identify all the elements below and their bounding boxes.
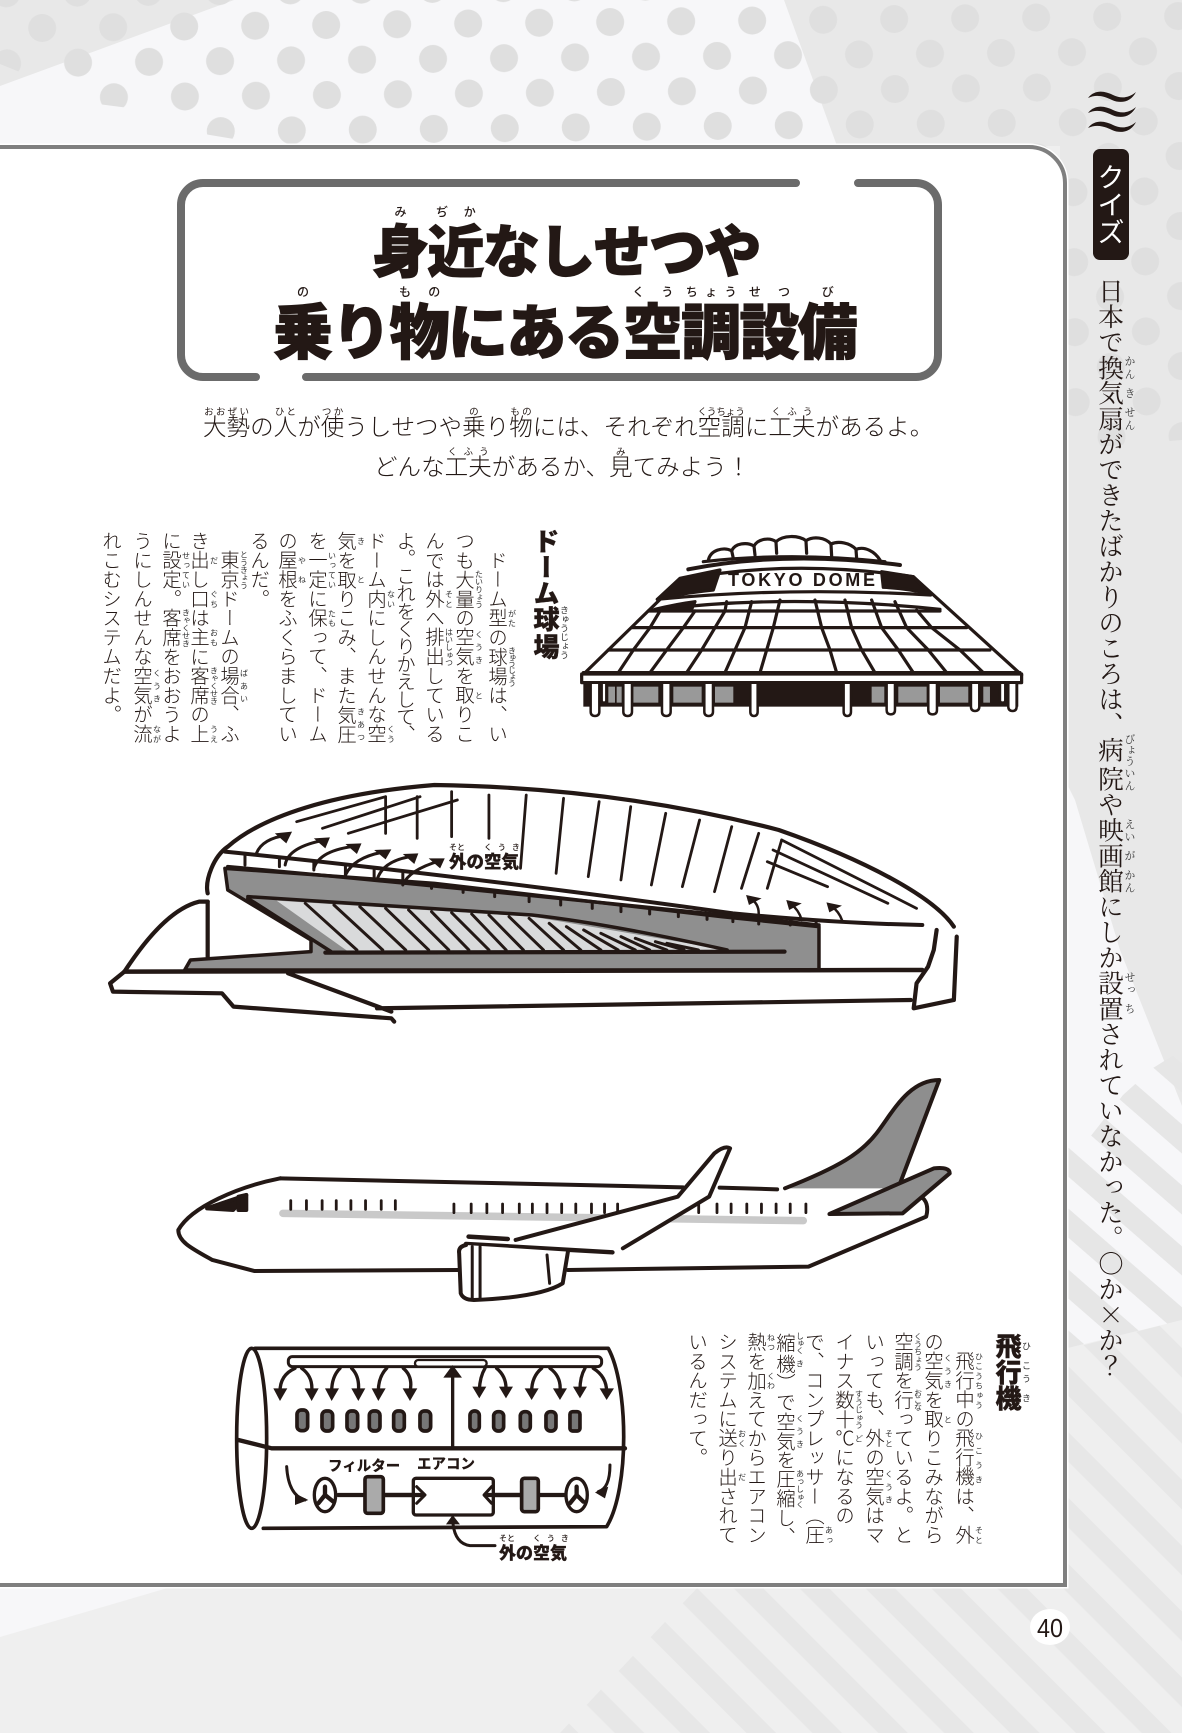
text block: dome stadium explanation: を 一定いってい に 保たも って、ドーム xyxy=(304,531,338,743)
text block: airplane explanation: 空調くうちょう を 行おこな っているよ。と xyxy=(890,1332,924,1544)
label: outside air (cabin): 外の空気 xyxy=(499,1539,567,1564)
intro text line 1: 大勢おおぜいの人ひとが使つかうしせつや乗のり物ものには、それぞれ空調くうちょうに工夫くふうがあるよ。 xyxy=(203,404,933,442)
text block: dome stadium explanation: よ。これをくりかえして、 xyxy=(392,531,420,742)
text block: dome stadium explanation: に 設定せってい 。 客席きゃくせき をおおうよ xyxy=(158,531,192,743)
icon: wave marks xyxy=(1088,92,1136,132)
label: outside air (cabin): くうき xyxy=(533,1533,575,1544)
text block: airplane explanation: 飛行中ひこうちゅう の 飛行機ひこうき は、 外そと xyxy=(951,1351,984,1544)
text block: dome stadium explanation: き 出だ し 口ぐち は 主おも に 客席きゃくせき の 上うえ xyxy=(186,531,220,743)
text block: airplane explanation: いるんだって。 xyxy=(684,1332,712,1467)
heading: dome stadium: ドーム 球きゅう 場じょう xyxy=(528,528,571,660)
quiz badge xyxy=(1093,149,1129,260)
text block: airplane explanation: で、コンプレッサー（ 圧あっ xyxy=(801,1332,834,1544)
text block: dome stadium explanation: つも 大量たいりょう の 空気くうき を 取と りこ xyxy=(451,531,484,743)
page number: 40 xyxy=(1037,1613,1063,1643)
text block: airplane explanation: 縮しゅく 機き ）で 空気くうき を 圧縮あっしゅく し、 xyxy=(772,1332,806,1547)
text block: dome stadium explanation: ドーム 内ない にしんせんな 空くう xyxy=(363,531,396,743)
text block: airplane explanation: イナス 数十すうじゅう ℃ど になるの xyxy=(831,1332,864,1525)
label: outside air (dome): そと xyxy=(449,842,465,853)
text block: dome stadium explanation: 気き を 取と りこみ、また 気圧きあつ xyxy=(333,531,366,743)
text block: dome stadium explanation: ドーム 型がた の 球場きゅうじょう は、い xyxy=(484,550,518,743)
text block: dome stadium explanation: れこむシステムだよ。 xyxy=(98,531,126,724)
text block: dome stadium explanation: うにしんせんな 空気くうき が 流なが xyxy=(129,531,162,743)
text block: dome stadium explanation: の 屋根やね をふくらましてい xyxy=(274,531,308,743)
text block: airplane explanation: 熱ねつ を 加くわ えてからエアコン xyxy=(743,1332,776,1544)
text block: airplane explanation: の 空気くうき を 取と りこみながら xyxy=(920,1332,954,1544)
text block: dome stadium explanation: るんだ。 xyxy=(246,531,274,608)
title line 1: 身み近ぢかなしせつや xyxy=(372,203,760,289)
text block: dome stadium explanation: んでは 外そと へ 排出はいしゅつ している xyxy=(421,531,454,743)
label: filter: フィルター xyxy=(328,1455,400,1476)
label: outside air (dome): くうき xyxy=(484,842,526,853)
title line 2: 乗のり物ものにある空くう調ちょう設せつ備び xyxy=(273,283,856,372)
text block: airplane explanation: いっても、 外そと の 空気くうき はマ xyxy=(861,1332,894,1544)
intro text line 2: どんな工夫くふうがあるか、見みてみよう！ xyxy=(374,444,750,482)
quiz badge: クイズ xyxy=(1091,163,1131,246)
text block: dome stadium explanation: 東京とうきょう ドームの 場合ばあい 、ふ xyxy=(216,550,250,743)
label: air conditioner: エアコン xyxy=(417,1453,475,1474)
label: TOKYO DOME: TOKYO DOME xyxy=(728,570,875,590)
label: outside air (cabin): そと xyxy=(499,1533,515,1544)
text block: airplane explanation: システムに 送おく り 出だ されて xyxy=(714,1332,748,1544)
heading: airplane: 飛ひ 行こう 機き xyxy=(990,1333,1033,1411)
quiz text: 日本で 換かん 気き 扇せん ができたばかりのころは、病びょう 院いん や 映えい 画が 館かん にしか 設せっ 置ち されていなかった。○か×か？ xyxy=(1093,278,1138,1378)
label: outside air (dome): 外の空気 xyxy=(449,849,519,874)
